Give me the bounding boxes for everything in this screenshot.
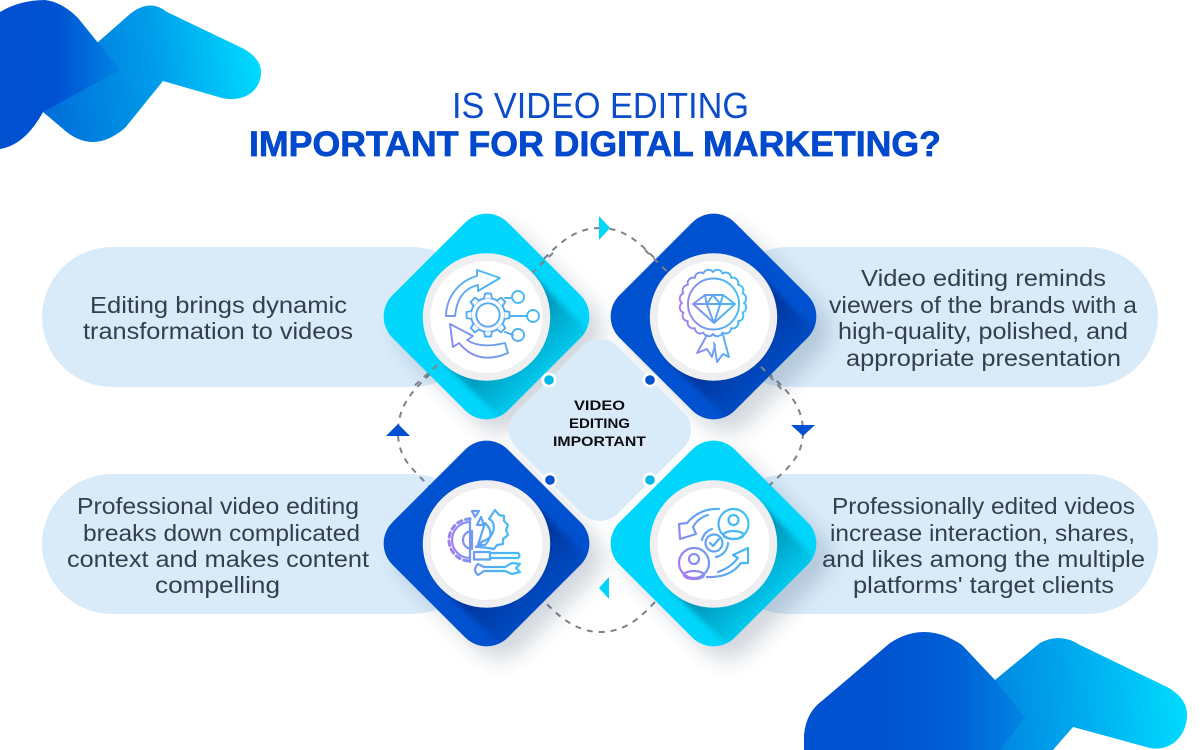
decorative blob: top left (0, 0, 261, 149)
panel: top-left text pill (42, 247, 482, 387)
text: top-right: Video editing reminds (861, 265, 1106, 291)
arrowhead: left (386, 424, 410, 436)
text: bottom-right (822, 493, 1145, 598)
text: bottom-right: and likes among the multiple (822, 546, 1145, 572)
connector dot: lower left (542, 472, 558, 488)
title: IMPORTANT FOR DIGITAL MARKETING? (249, 125, 941, 164)
diamond card: bottom-right, cyan (610, 440, 836, 667)
text: bottom-left: breaks down complicated (83, 520, 360, 546)
diamond card: top-right, blue (610, 214, 836, 440)
text: top-left: transformation to videos (83, 318, 353, 344)
center label (553, 397, 646, 449)
text: bottom-right: platforms' target clients (853, 572, 1114, 598)
diamond card: top-left, cyan (384, 214, 610, 440)
text: top-right: viewers of the brands with a (829, 292, 1137, 318)
text: top-left: Editing brings dynamic (90, 292, 347, 318)
arrowhead: top (599, 216, 610, 240)
connector dot: upper left (542, 372, 556, 388)
center label: EDITING (569, 415, 630, 431)
panel: top-right text pill (718, 247, 1158, 387)
panel: bottom-right text pill (718, 474, 1158, 614)
text: top-right (829, 265, 1137, 371)
center label: VIDEO (574, 397, 625, 413)
text: bottom-left: context and makes content (67, 546, 370, 572)
text: top-right: high-quality, polished, and (838, 318, 1128, 344)
title: IS VIDEO EDITING (452, 85, 749, 126)
arrowhead: right (791, 425, 815, 436)
text: top-left (83, 292, 353, 344)
panel: bottom-left text pill (42, 474, 482, 614)
icon: gears and tools (449, 510, 520, 575)
arrowhead: bottom (599, 577, 609, 599)
connector dot: lower right (642, 472, 658, 488)
icon: diamond medal with ribbons (680, 270, 746, 362)
diamond card: bottom-left, blue (384, 440, 610, 667)
text: bottom-left: Professional video editing (77, 493, 359, 519)
text: bottom-right: increase interaction, shares, (830, 520, 1135, 546)
text: bottom-right: Professionally edited videos (832, 493, 1135, 519)
text: top-right: appropriate presentation (846, 345, 1121, 371)
icon: gear with arrows and nodes (446, 270, 539, 358)
panel: center diamond (499, 329, 701, 531)
text: bottom-left: compelling (155, 572, 280, 598)
connector dot: upper right (642, 372, 658, 388)
decorative blob: bottom right (804, 632, 1187, 750)
dashed cycle path (398, 228, 803, 632)
title (249, 85, 941, 164)
center label: IMPORTANT (553, 433, 646, 449)
text: bottom-left (67, 493, 370, 598)
icon: people exchange with check (679, 509, 748, 579)
